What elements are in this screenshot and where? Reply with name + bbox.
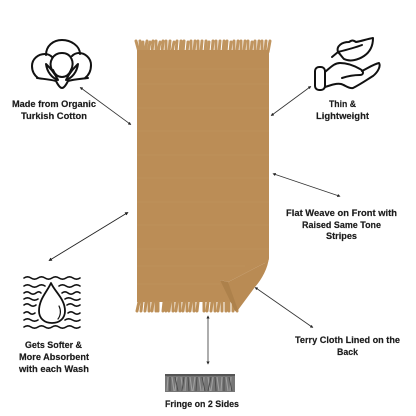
caption: flat weave: Stripes: [326, 231, 357, 242]
caption: softer: More Absorbent: [19, 352, 90, 363]
caption: organic cotton: [12, 99, 96, 122]
caption: terry cloth: [295, 335, 400, 358]
caption: lightweight: Lightweight: [316, 111, 370, 122]
towel body: [137, 50, 269, 302]
icon: hand with leaf: [315, 38, 380, 90]
caption: softer: Gets Softer &: [25, 340, 82, 351]
fringe swatch: [165, 374, 235, 392]
top fringe: [136, 41, 270, 52]
caption: softer: with each Wash: [18, 364, 89, 375]
caption: softer: [18, 340, 90, 375]
caption: lightweight: Thin &: [329, 99, 356, 110]
caption: lightweight: [316, 99, 370, 122]
icon: cotton boll: [32, 40, 91, 88]
arrow: terry cloth: [256, 288, 312, 327]
caption: flat weave: Raised Same Tone: [302, 220, 381, 231]
caption: terry cloth: Back: [337, 347, 359, 358]
raised stripes: [137, 69, 269, 284]
arrow: flat weave: [274, 174, 339, 196]
bottom fringe: [137, 302, 237, 311]
caption: flat weave: [286, 208, 397, 242]
arrow: lightweight: [272, 87, 310, 115]
folded corner: [228, 257, 269, 310]
caption: organic cotton: Made from Organic: [12, 99, 96, 110]
arrow: fringe: [207, 317, 209, 363]
arrow: softer: [50, 213, 127, 260]
caption: flat weave: Flat Weave on Front with: [286, 208, 397, 219]
caption: terry cloth: Terry Cloth Lined on the: [295, 335, 400, 346]
icon: water drop and waves: [24, 277, 80, 328]
towel: [136, 41, 270, 311]
caption: fringe: Fringe on 2 Sides: [165, 399, 239, 410]
caption: organic cotton: Turkish Cotton: [21, 111, 87, 122]
arrow: organic cotton: [81, 88, 130, 124]
